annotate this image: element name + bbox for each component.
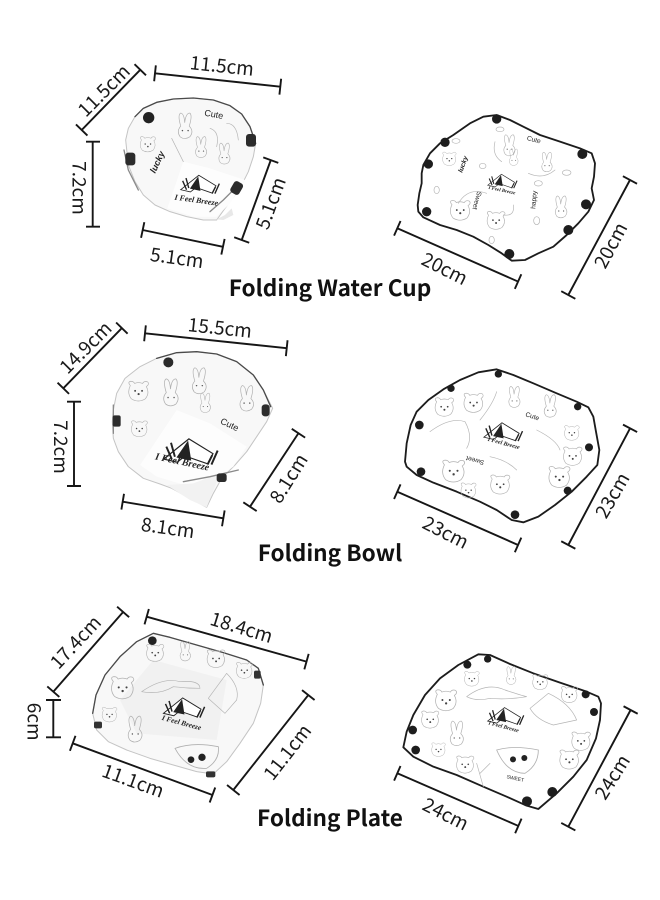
flat water cup sheet: Cute bbox=[526, 135, 542, 145]
product photo: plate bbox=[93, 633, 263, 777]
product photo: plate: I Feel Breeze bbox=[160, 713, 203, 732]
flat bowl sheet: Sweet bbox=[465, 454, 485, 466]
dimension: 17.4cm left bbox=[43, 607, 129, 697]
dimension: 11.5cm top bbox=[154, 48, 281, 95]
dimension: 8.1cm base side: 8.1cm bbox=[262, 448, 314, 508]
dimension: 7.2cm height bbox=[66, 142, 100, 227]
dimension: 11.1cm base side: 11.1cm bbox=[256, 718, 317, 785]
dimension: 5.1cm base front bbox=[141, 222, 225, 274]
product photo: water cup: I Feel Breeze bbox=[173, 193, 219, 208]
dimension: 14.9cm left: 14.9cm bbox=[53, 315, 117, 379]
flat water cup sheet: lucky bbox=[457, 155, 470, 174]
section: folding bowl bbox=[48, 310, 637, 568]
flat water cup sheet: I Feel Breeze bbox=[487, 186, 516, 197]
flat bowl sheet: Cute bbox=[524, 411, 540, 422]
dimension: 20cm front bbox=[394, 221, 521, 291]
flat plate sheet: SWEET bbox=[506, 774, 525, 784]
dimension: 8.1cm base front: 8.1cm bbox=[140, 510, 196, 544]
section: folding water cup bbox=[66, 48, 637, 303]
dimension: 20cm side bbox=[561, 176, 637, 299]
dimension: 23cm side: 23cm bbox=[588, 467, 635, 523]
dimension: 18.4cm top bbox=[145, 604, 309, 669]
product photo: water cup bbox=[124, 98, 256, 220]
dimension: 5.1cm base side bbox=[234, 157, 292, 243]
dimension: 23cm front: 23cm bbox=[418, 509, 474, 555]
dimension: 24cm front bbox=[394, 766, 522, 836]
heading: folding bowl: Folding Bowl bbox=[258, 535, 402, 568]
product photo: water cup: lucky bbox=[148, 149, 167, 175]
dimension: 23cm side bbox=[561, 425, 637, 549]
dimension: 20cm front: 20cm bbox=[417, 245, 473, 291]
dimension: 8.1cm base front bbox=[121, 494, 225, 544]
dimension: 6cm height: 6cm bbox=[22, 703, 48, 741]
product photo: water cup: Cute bbox=[204, 108, 224, 121]
flat plate sheet bbox=[403, 654, 601, 809]
dimension: 8.1cm base side bbox=[243, 429, 314, 511]
dimension: 5.1cm base side: 5.1cm bbox=[248, 173, 292, 233]
heading: folding plate: Folding Plate bbox=[257, 800, 403, 833]
dimension: 15.5cm top: 15.5cm bbox=[187, 310, 253, 344]
product photo: bowl: I Feel Breeze bbox=[153, 451, 211, 474]
dimension: 6cm height bbox=[22, 700, 61, 741]
dimension: 7.2cm height: 7.2cm bbox=[66, 161, 94, 215]
flat water cup sheet bbox=[418, 114, 595, 261]
flat water cup sheet: happy bbox=[530, 190, 539, 209]
dimension: 15.5cm top bbox=[144, 310, 288, 356]
flat bowl sheet: I Feel Breeze bbox=[486, 437, 521, 451]
dimension: 11.1cm base side bbox=[227, 690, 317, 795]
flat plate sheet: I Feel Breeze bbox=[487, 720, 520, 734]
heading: folding water cup: Folding Water Cup bbox=[229, 270, 431, 303]
dimension: 11.1cm base front: 11.1cm bbox=[99, 756, 168, 804]
section: folding plate bbox=[22, 604, 638, 836]
product photo: bowl bbox=[112, 352, 273, 507]
dimension: 11.5cm left: 11.5cm bbox=[71, 58, 136, 122]
dimension: 17.4cm left: 17.4cm bbox=[43, 609, 107, 674]
product photo: bowl: Cute bbox=[219, 416, 240, 433]
dimension: 5.1cm base front: 5.1cm bbox=[149, 240, 205, 274]
dimension: 11.5cm top: 11.5cm bbox=[189, 48, 255, 82]
dimension: 18.4cm top: 18.4cm bbox=[207, 604, 276, 649]
dimension: 11.1cm base front bbox=[70, 736, 215, 804]
dimension: 23cm front bbox=[394, 484, 521, 555]
dimension: 20cm side: 20cm bbox=[587, 217, 633, 273]
flat bowl sheet bbox=[405, 369, 599, 522]
dimension: 7.2cm height bbox=[48, 402, 81, 486]
dimension: 24cm front: 24cm bbox=[418, 790, 474, 836]
dimension: 24cm side: 24cm bbox=[587, 749, 636, 804]
dimension: 24cm side bbox=[561, 706, 638, 830]
dimension: 7.2cm height: 7.2cm bbox=[48, 420, 75, 474]
flat water cup sheet: Sweet bbox=[471, 191, 482, 210]
